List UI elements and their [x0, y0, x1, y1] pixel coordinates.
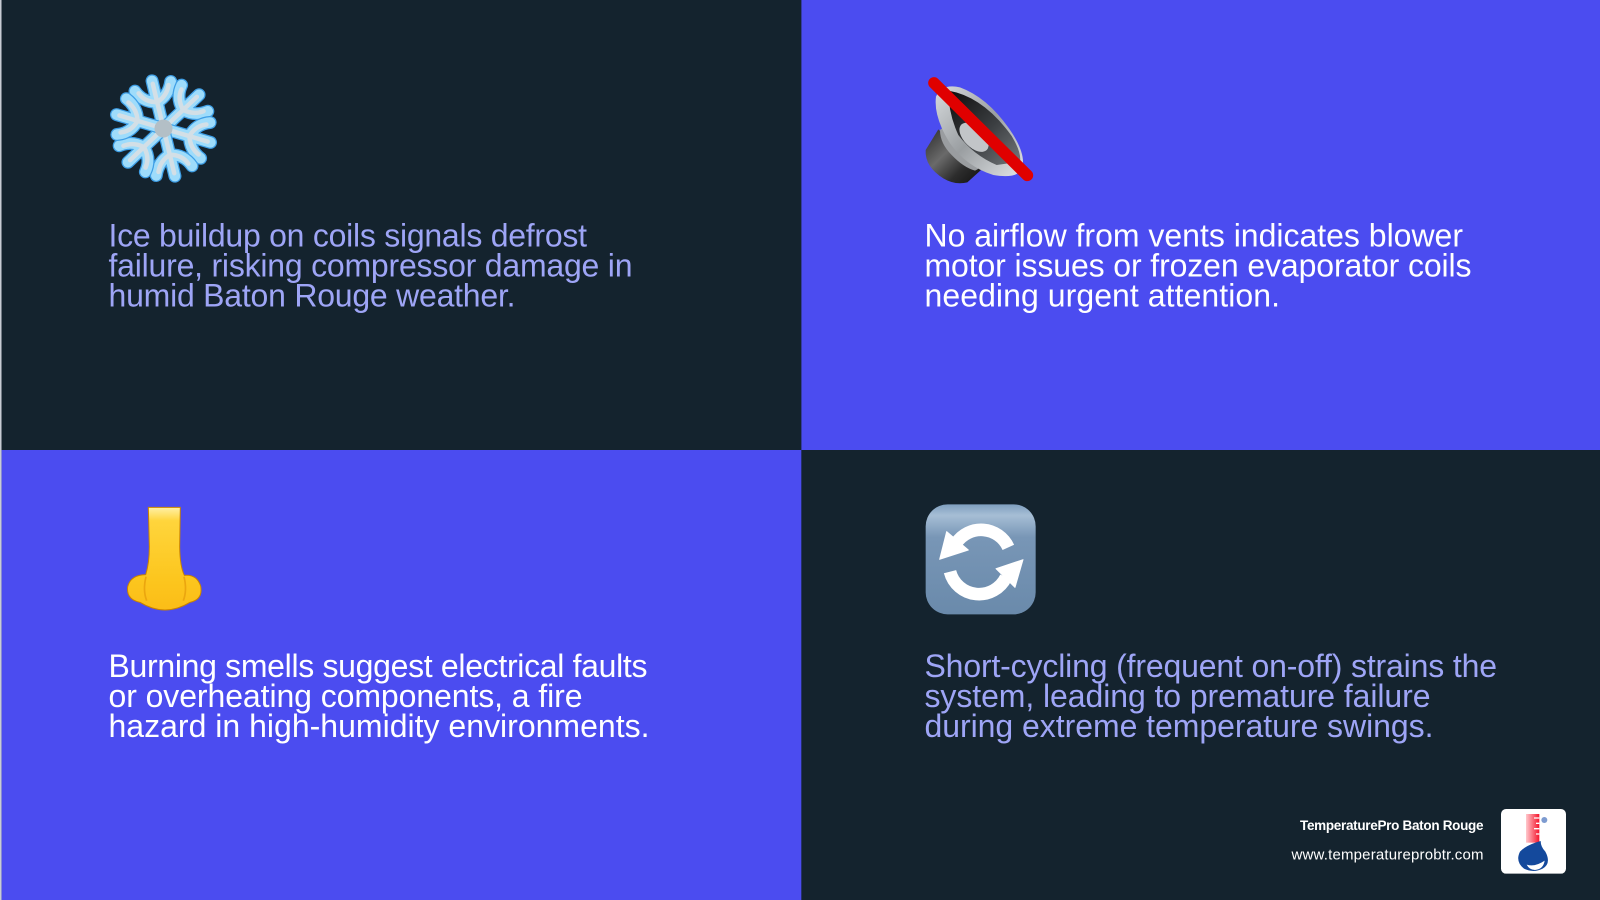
icon: repeat arrows [926, 504, 1036, 614]
panel: burning smells [2, 450, 801, 900]
icon: red slash [934, 83, 1027, 175]
footer brand [1290, 809, 1566, 874]
text: burning smells: hazard in high-humidity environments. [108, 708, 650, 744]
text: burning smells: Burning smells suggest electrical faults [108, 648, 648, 684]
icon: nose [127, 507, 201, 610]
icon: muted speaker [926, 83, 1027, 183]
text: short-cycling: system, leading to premature failure [924, 678, 1430, 714]
text: no airflow: motor issues or frozen evaporator coils [924, 248, 1472, 284]
panel: ice buildup [2, 0, 801, 450]
text: no airflow: needing urgent attention. [924, 278, 1280, 314]
icon: snowflake [102, 69, 225, 188]
panel: no airflow [801, 0, 1600, 450]
text: burning smells: or overheating components, a fire [108, 678, 582, 714]
panel: short-cycling [801, 450, 1600, 900]
brand name: TemperaturePro Baton Rouge [1300, 818, 1484, 833]
text: ice buildup: humid Baton Rouge weather. [108, 278, 516, 314]
text: ice buildup: Ice buildup on coils signals defrost [108, 218, 587, 254]
text: no airflow: No airflow from vents indicates blower [924, 218, 1463, 254]
background strip [0, 0, 2, 900]
text: ice buildup: failure, risking compressor damage in [108, 248, 632, 284]
text: short-cycling: Short-cycling (frequent on-off) strains the [924, 648, 1497, 684]
text: short-cycling: during extreme temperature swings. [924, 708, 1434, 744]
logo [1501, 809, 1566, 874]
website url: www.temperatureprobtr.com [1290, 846, 1484, 863]
